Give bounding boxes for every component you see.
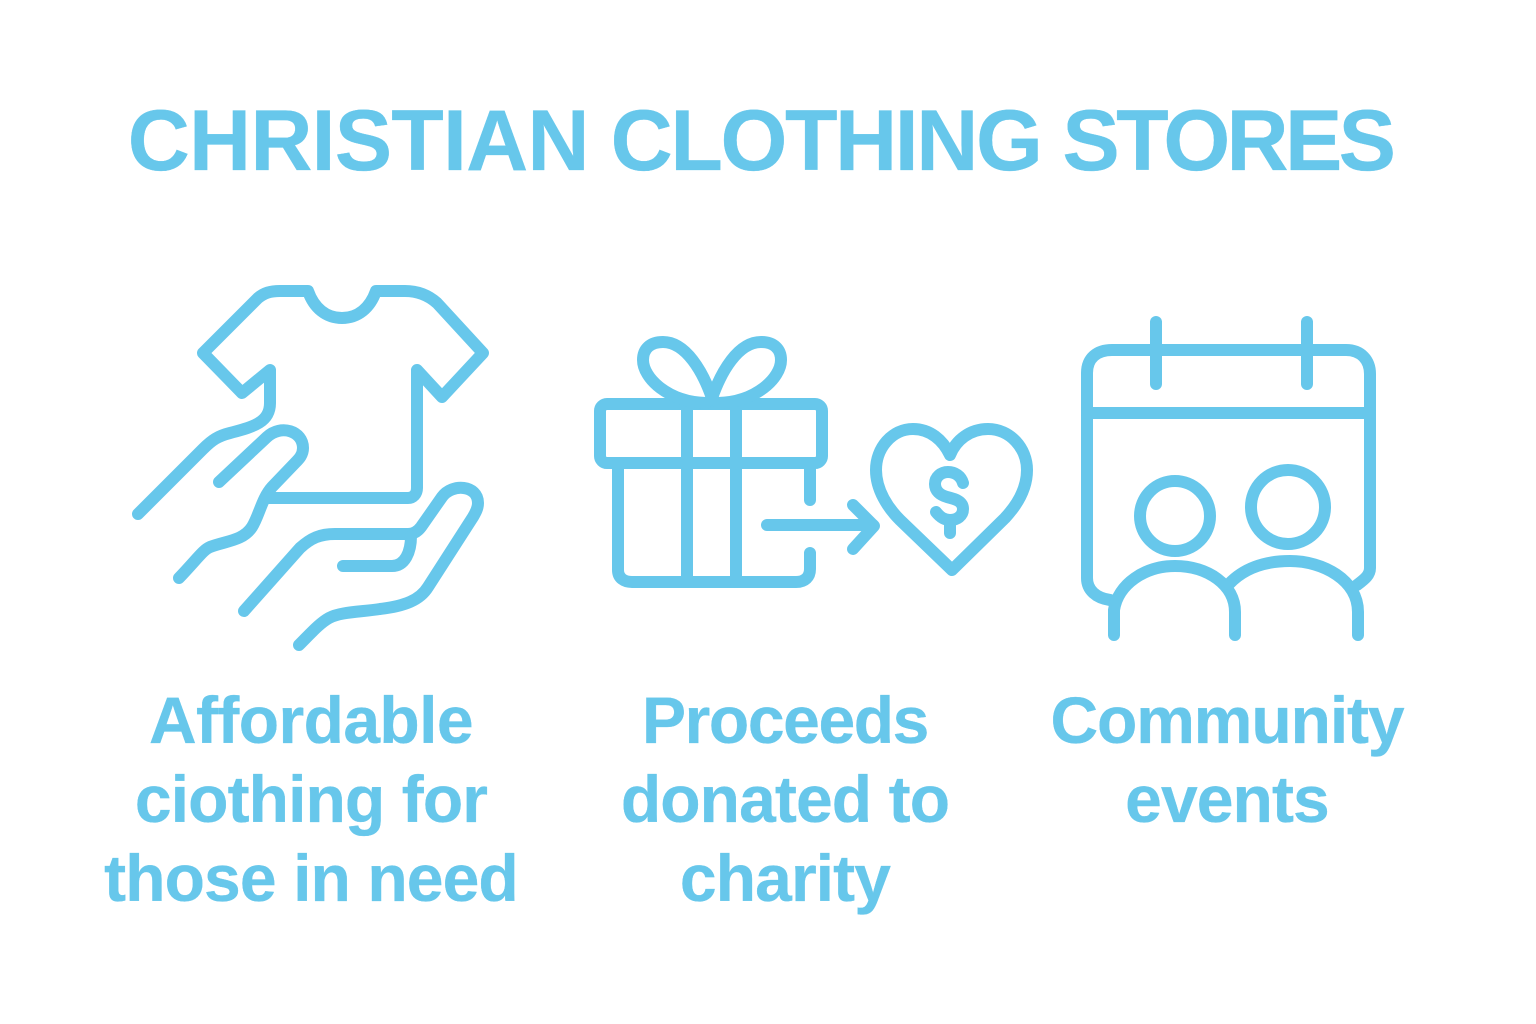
label: proceeds donated: Proceeds [642, 683, 928, 757]
label: community events: events [1125, 762, 1329, 836]
icon: t-shirt in hands [138, 291, 483, 645]
icon: calendar with people [1087, 322, 1370, 635]
title: CHRISTIAN CLOTHING STORES [128, 93, 1392, 189]
icon: gift box [600, 342, 822, 582]
label: proceeds donated [621, 683, 949, 915]
label: proceeds donated: donated to [621, 762, 949, 836]
label: community events: Community [1050, 683, 1404, 757]
label: affordable clothing [104, 683, 518, 915]
label: community events [1050, 683, 1404, 836]
label: affordable clothing: Affordable [149, 683, 473, 757]
icon: arrow [767, 505, 874, 549]
label: proceeds donated: charity [680, 841, 890, 915]
label: affordable clothing: ciothing for [135, 762, 487, 836]
icon: heart with dollar [876, 429, 1027, 570]
label: affordable clothing: those in need [104, 841, 518, 915]
